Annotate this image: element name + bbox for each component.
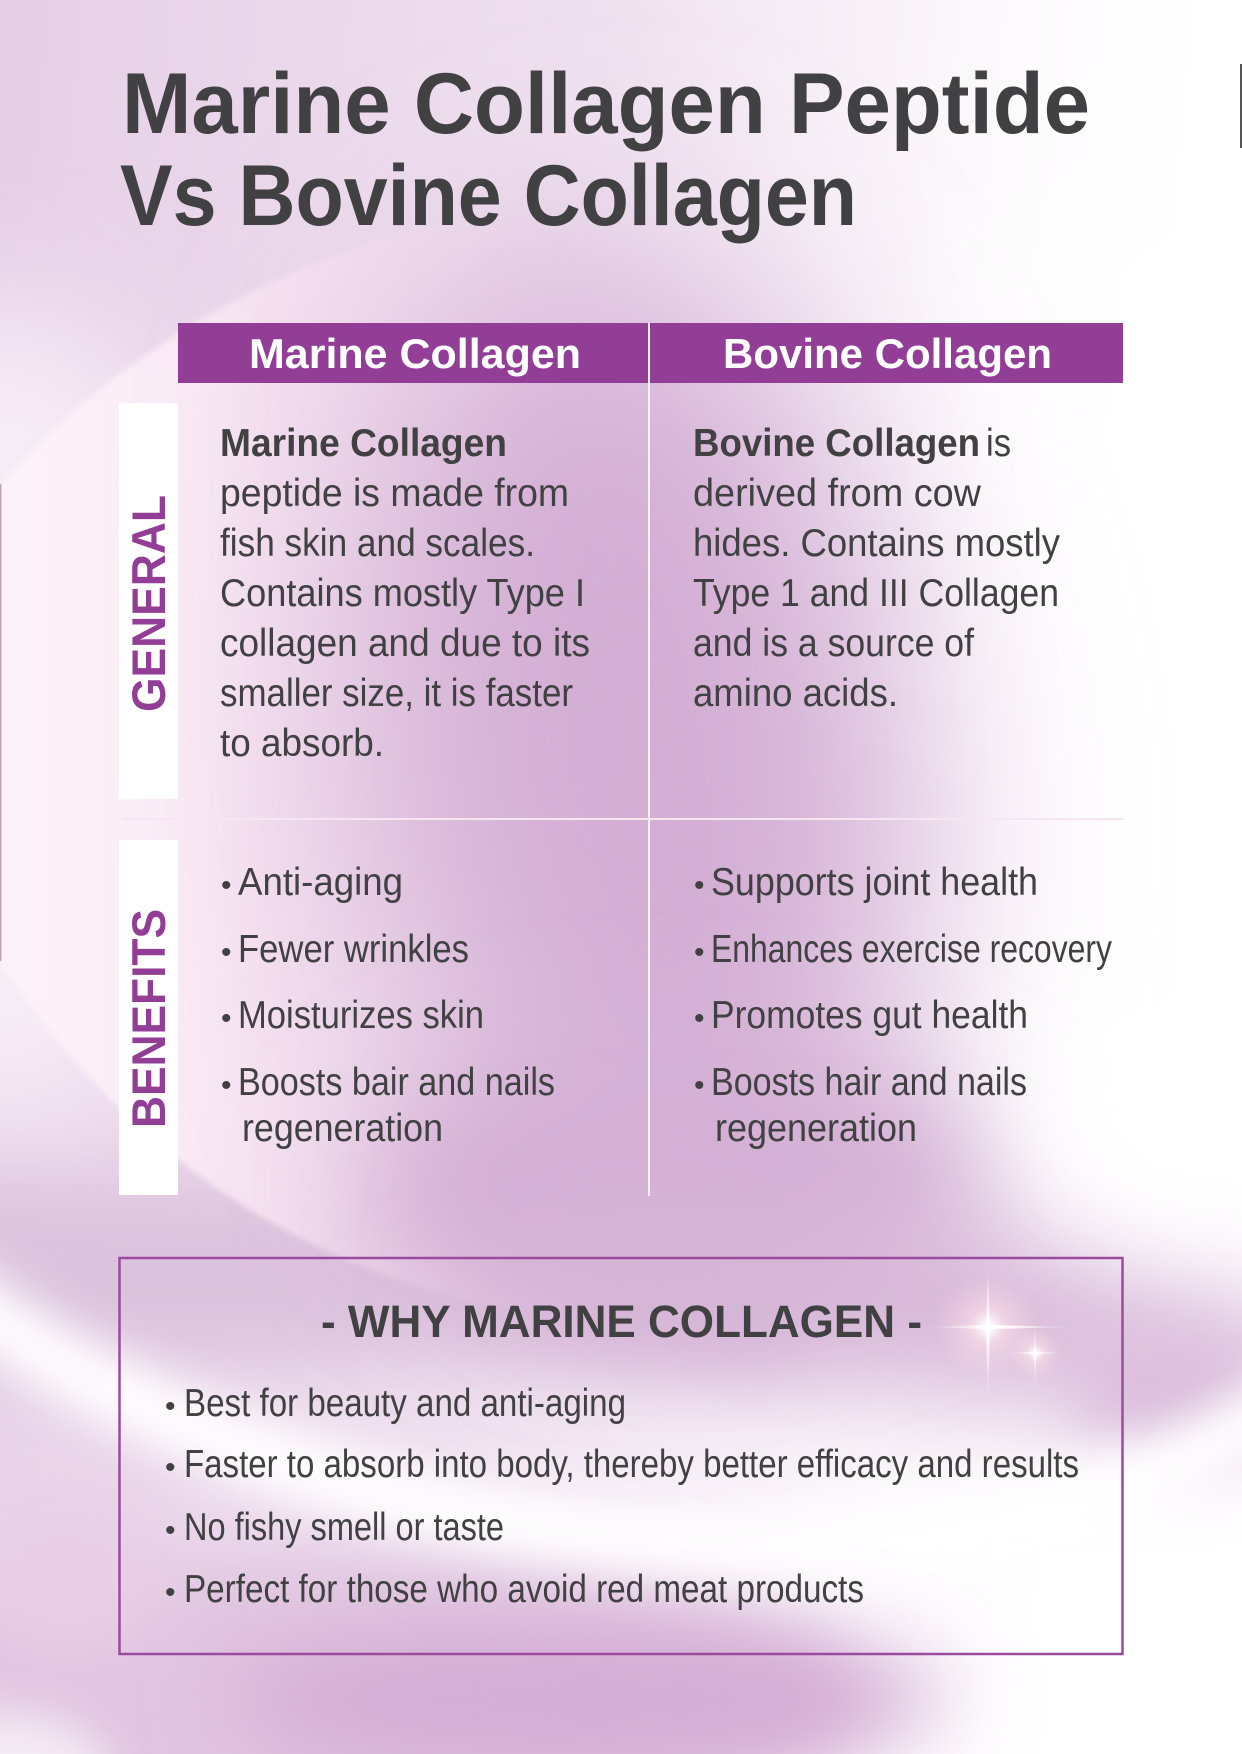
bovine general text: hides. Contains mostly (693, 522, 1060, 565)
bovine benefits list: Enhances exercise recovery (711, 928, 1112, 971)
bovine general text: is (986, 422, 1011, 465)
reasons list: Perfect for those who avoid red meat products (184, 1568, 864, 1611)
marine general text: to absorb. (220, 722, 384, 765)
panel: why marine collagen (120, 1258, 1122, 1654)
bovine benefits list: • (694, 1002, 705, 1035)
table header: bovine collagen: Bovine Collagen (723, 330, 1052, 377)
panel heading: - WHY MARINE COLLAGEN - (321, 1296, 922, 1347)
marine general text: smaller size, it is faster (220, 672, 573, 715)
marine general text: fish skin and scales. (220, 522, 535, 565)
bovine benefits list: Supports joint health (711, 861, 1038, 904)
row label: benefits (119, 840, 178, 1195)
reasons list: • (165, 1514, 176, 1547)
bovine benefits list: • (694, 869, 705, 902)
bovine benefits list: regeneration (715, 1107, 917, 1150)
row label: general: GENERAL (122, 495, 175, 712)
marine general text: Contains mostly Type I (220, 572, 585, 615)
marine general text: peptide is made from (220, 472, 569, 515)
table header: marine collagen: Marine Collagen (249, 330, 581, 377)
bovine general text: amino acids. (693, 672, 898, 715)
marine benefits list: Anti-aging (238, 861, 403, 904)
bovine general text: Bovine Collagen (693, 422, 980, 465)
bovine benefits list: Boosts hair and nails (711, 1061, 1027, 1104)
bovine benefits list: • (694, 936, 705, 969)
marine benefits list: • (221, 1002, 232, 1035)
bovine general text: and is a source of (693, 622, 974, 665)
reasons list: Faster to absorb into body, thereby better efficacy and results (184, 1443, 1079, 1486)
marine benefits list: Fewer wrinkles (238, 928, 469, 971)
marine benefits list: regeneration (242, 1107, 443, 1150)
marine benefits list: • (221, 869, 232, 902)
reasons list: No fishy smell or taste (184, 1506, 504, 1549)
table header: marine collagen (178, 323, 648, 383)
marine benefits list: Moisturizes skin (238, 994, 484, 1037)
reasons list: Best for beauty and anti-aging (184, 1382, 626, 1425)
reasons list: • (165, 1390, 176, 1423)
title (120, 56, 1090, 244)
bovine general text (693, 422, 1060, 715)
reasons list: • (165, 1451, 176, 1484)
comparison table (119, 323, 1124, 1196)
bovine benefits list (694, 861, 1112, 1150)
marine benefits list: • (221, 1069, 232, 1102)
bovine general text: Type 1 and III Collagen (693, 572, 1059, 615)
row label: general (119, 403, 178, 799)
marine general text: Marine Collagen (220, 422, 507, 465)
marine general text (220, 422, 590, 765)
row label: benefits: BENEFITS (122, 909, 175, 1128)
bovine benefits list: • (694, 1069, 705, 1102)
title: Marine Collagen Peptide (122, 56, 1090, 152)
marine benefits list: Boosts bair and nails (238, 1061, 555, 1104)
bovine benefits list: Promotes gut health (711, 994, 1028, 1037)
reasons list (165, 1382, 1079, 1611)
marine general text: collagen and due to its (220, 622, 590, 665)
marine benefits list (221, 861, 555, 1150)
reasons list: • (165, 1576, 176, 1609)
bovine general text: derived from cow (693, 472, 982, 515)
table header: bovine collagen (650, 323, 1123, 383)
icon: sparkles (925, 1262, 1075, 1400)
marine benefits list: • (221, 936, 232, 969)
title: Vs Bovine Collagen (120, 148, 857, 244)
